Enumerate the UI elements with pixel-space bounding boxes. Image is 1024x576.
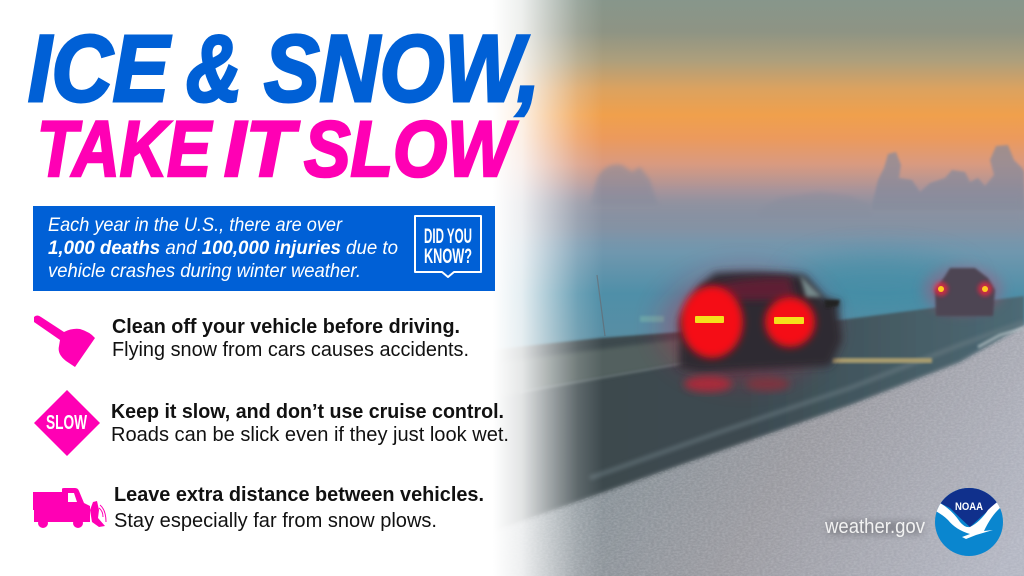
photo: snow texture — [543, 325, 1024, 576]
panel: did you know — [33, 206, 495, 291]
icon: NOAA logo: NOAA — [955, 501, 983, 513]
title line 2: IT — [224, 104, 300, 193]
photo: near car — [660, 270, 842, 392]
website label: weather.gov — [824, 516, 925, 538]
icon: NOAA logo — [935, 488, 1003, 556]
photo: far car — [923, 266, 1003, 316]
title line 2: SLOW — [304, 104, 519, 193]
photo: sunset sky — [502, 0, 1024, 348]
stat text: Each year in the U.S., there are over — [48, 215, 343, 236]
photo: foggy winter road at dusk — [470, 0, 1024, 576]
tip: clean off vehicle — [34, 316, 469, 367]
stat text — [48, 215, 398, 282]
title — [28, 16, 540, 193]
photo: fog band below trees — [660, 202, 767, 205]
tip text: Leave extra distance between vehicles. — [114, 484, 484, 506]
tip text: Flying snow from cars causes accidents. — [112, 339, 469, 361]
photo: snow patches at road edge — [978, 328, 1024, 347]
photo: teal fog around car — [802, 247, 952, 308]
tip text: Clean off your vehicle before driving. — [112, 316, 460, 338]
photo: pole — [597, 275, 605, 336]
icon: snow plow truck — [33, 488, 106, 528]
icon: did you know speech bubble — [415, 216, 481, 277]
tip text — [114, 484, 484, 532]
photo: white fade into panel — [478, 0, 603, 576]
icon: snow scraper — [34, 316, 95, 367]
title line 1: SNOW, — [264, 16, 540, 122]
tip: extra distance — [33, 484, 484, 532]
tip text: Roads can be slick even if they just look wet. — [111, 424, 509, 446]
tip text — [111, 401, 509, 446]
title line 2 — [37, 104, 519, 193]
stat text: 1,000 deaths and 100,000 injuries due to — [48, 238, 398, 259]
photo: slush line — [590, 322, 1024, 478]
photo: guard rail — [538, 340, 680, 386]
tip: keep it slow — [34, 390, 509, 456]
photo: yellow road reflection — [832, 358, 932, 363]
tip text — [112, 316, 469, 361]
stat text: vehicle crashes during winter weather. — [48, 261, 361, 282]
photo: snowy roadside — [470, 322, 1024, 576]
title line 1: & — [186, 16, 242, 122]
icon: slow sign — [34, 390, 100, 456]
icon: did you know speech bubble: KNOW? — [424, 245, 472, 268]
tip text: Stay especially far from snow plows. — [114, 510, 437, 532]
photo: hazy treeline — [593, 144, 1024, 204]
photo: ground base — [512, 295, 1024, 522]
tip text: Keep it slow, and don’t use cruise control. — [111, 401, 504, 423]
icon: slow sign: SLOW — [46, 412, 87, 434]
title line 1: ICE — [28, 16, 171, 122]
photo: cyan sign blur — [640, 316, 664, 322]
icon: did you know speech bubble: DID YOU — [424, 225, 472, 248]
title line 1 — [28, 16, 540, 122]
title line 2: TAKE — [37, 104, 213, 193]
